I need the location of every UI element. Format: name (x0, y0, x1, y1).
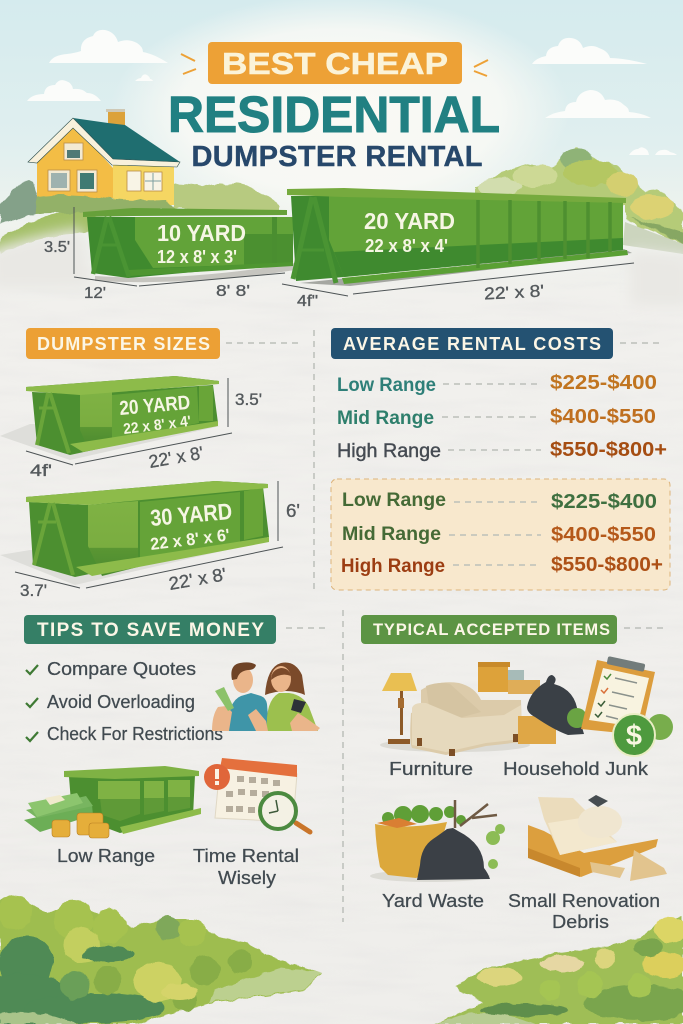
panel: typical accepted items (361, 615, 673, 932)
dumpster: 30 yard side view: 22' x 8' (167, 564, 228, 594)
cost list (337, 372, 667, 462)
dumpster: 10 yard (83, 208, 295, 282)
panel: dumpster sizes (0, 328, 302, 600)
item labels row 1: Furniture (389, 759, 473, 779)
heading: average rental costs (331, 328, 613, 359)
panel: average rental costs (331, 328, 670, 590)
tips checklist: Avoid Overloading (47, 692, 195, 712)
tips checklist (26, 659, 223, 744)
icon: renovation debris (528, 795, 667, 881)
heading: typical accepted items: TYPICAL ACCEPTED ITEMS (373, 621, 610, 639)
tip labels: Low Range (57, 846, 155, 866)
cost list: Mid Range (337, 408, 434, 429)
tips checklist: Compare Quotes (47, 659, 196, 679)
bush behind house centre (174, 183, 280, 215)
item labels row 2: Small Renovation (508, 891, 660, 911)
clouds (27, 30, 677, 155)
foliage: bottom left (0, 895, 322, 1024)
heading: residential: RESIDENTIAL (168, 86, 500, 143)
foliage: bottom right (435, 915, 683, 1024)
tips checklist: Check For Restrictions (47, 724, 223, 744)
heading: tips (24, 615, 276, 644)
cost list: $400-$550 (550, 406, 656, 428)
item labels row 2: Debris (552, 912, 609, 932)
tip labels (57, 846, 299, 888)
bush right (475, 146, 683, 245)
cost box: $225-$400 (551, 491, 657, 513)
hero dimensions: 8' 8' (216, 283, 250, 300)
cost box: Low Range (342, 490, 446, 511)
cost list: $225-$400 (550, 372, 657, 394)
dumpster: 10 yard: 10 YARD (157, 220, 246, 246)
dumpster: 30 yard side view: 22 x 8' x 6' (149, 525, 231, 554)
cost box: $550-$800+ (551, 554, 663, 576)
dumpster: 30 yard side view: 3.7' (20, 581, 47, 600)
dumpster: 20 yard: 22 x 8' x 4' (365, 236, 448, 256)
hero dimensions: 3.5' (44, 239, 70, 256)
icon: couple with phones (212, 662, 320, 731)
cost box (331, 479, 670, 590)
item labels row 2: Yard Waste (382, 891, 484, 911)
badge: best cheap: BEST CHEAP (222, 46, 448, 81)
dumpster: 30 yard side view: 30 YARD (149, 498, 233, 531)
heading: tips: TIPS TO SAVE MONEY (37, 620, 264, 641)
dumpster: 10 yard: 12 x 8' x 3' (157, 247, 237, 267)
hero dimensions (44, 207, 634, 310)
heading: average rental costs: AVERAGE RENTAL COSTS (343, 334, 601, 354)
cost box: High Range (341, 556, 445, 577)
dumpster: 20 yard (287, 188, 632, 286)
cost box: Mid Range (342, 524, 441, 545)
badge: best cheap (181, 42, 488, 84)
cost box: $400-$550 (551, 524, 656, 546)
hero dimensions: 4f" (297, 293, 318, 310)
bush left (0, 181, 98, 254)
panel: tips to save money (24, 615, 328, 888)
ground hero (0, 228, 683, 306)
dumpster: 20 yard side view: 3.5' (235, 390, 262, 409)
dumpster: 20 yard: 20 YARD (364, 208, 455, 234)
dumpster: 30 yard side view: 6' (286, 501, 300, 521)
icon: cash and dumpster (24, 766, 201, 838)
hero dimensions: 12' (84, 285, 106, 302)
dumpster: 20 yard side view: 20 YARD (119, 392, 191, 420)
tip labels: Wisely (218, 868, 276, 888)
dumpster: 20 yard side view: 4f' (30, 461, 52, 480)
item labels row 1: Household Junk (503, 759, 649, 779)
item labels row 1 (389, 759, 649, 779)
dumpster: 20 yard side view: 22 x 8' x 4' (122, 413, 192, 438)
dumpster: 20 yard side view (0, 376, 262, 480)
icon: calendar with clock (204, 758, 310, 832)
icon: yard waste (370, 800, 505, 882)
icon: household junk (478, 656, 673, 756)
dumpster: 30 yard side view (0, 481, 300, 600)
icon: lamp and sofa (380, 673, 530, 756)
cost list: Low Range (337, 375, 436, 396)
dumpster: 20 yard side view: 22' x 8' (147, 443, 205, 472)
icon: house (28, 109, 180, 205)
heading: dumpster sizes (26, 328, 220, 359)
cost list: $550-$800+ (550, 439, 667, 461)
title (168, 42, 500, 173)
heading: typical accepted items (361, 615, 617, 644)
back bushes (0, 146, 683, 254)
shrubs in front of house (35, 195, 175, 214)
tip labels: Time Rental (193, 846, 299, 866)
heading: dumpster sizes: DUMPSTER SIZES (37, 334, 210, 354)
cost list: High Range (337, 441, 441, 462)
icon: household junk: $ (626, 720, 642, 752)
heading: dumpster rental: DUMPSTER RENTAL (192, 141, 482, 173)
hero dimensions: 22' x 8' (484, 281, 544, 304)
item labels row 2 (382, 891, 660, 932)
